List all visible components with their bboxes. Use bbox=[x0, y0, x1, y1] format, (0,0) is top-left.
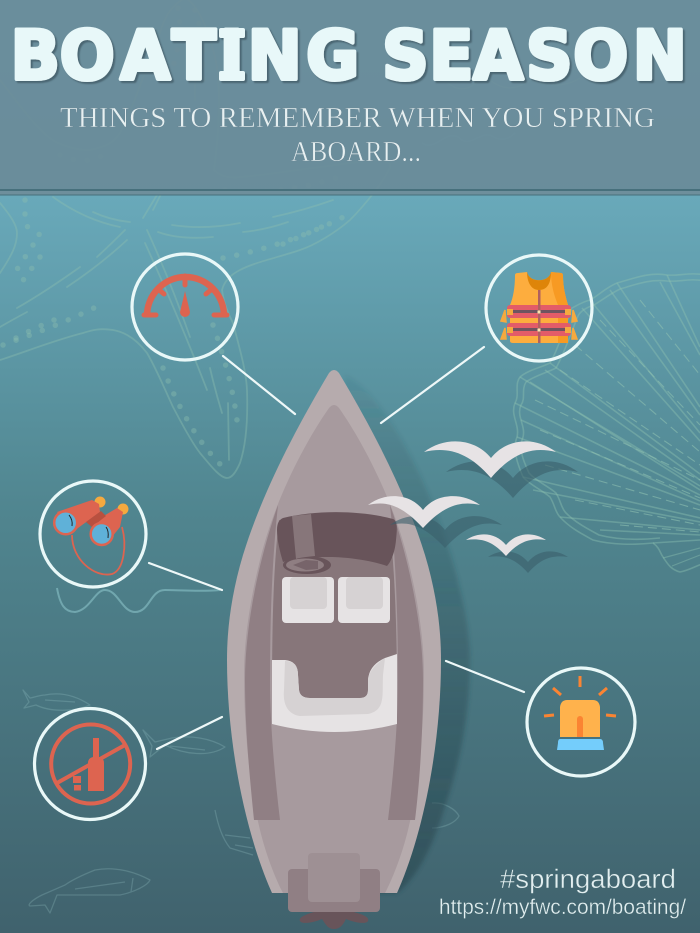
subtitle: THINGS TO REMEMBER WHEN YOU SPRING bbox=[60, 103, 655, 134]
front seats bbox=[282, 577, 390, 623]
motor bbox=[288, 853, 380, 929]
steering wheel bbox=[283, 556, 331, 574]
boat shadow bbox=[300, 375, 470, 893]
decoration: waves and fish bbox=[23, 76, 580, 913]
bird: small bbox=[466, 534, 546, 556]
bird shadows bbox=[390, 461, 578, 573]
rear bench seat bbox=[272, 654, 397, 732]
connector lines bbox=[149, 347, 524, 749]
website url: https://myfwc.com/boating/ bbox=[439, 896, 686, 919]
icon: speedometer bbox=[132, 254, 238, 360]
subtitle: ABOARD... bbox=[291, 137, 421, 168]
decoration: starfish outline bbox=[0, 0, 390, 478]
bird: medium bbox=[368, 496, 480, 528]
deck bbox=[244, 405, 424, 893]
icon: binoculars bbox=[40, 481, 146, 587]
boat bbox=[227, 370, 441, 929]
gunwale bands bbox=[245, 505, 280, 820]
windscreen bbox=[277, 512, 397, 566]
bird: large bbox=[424, 441, 556, 478]
birds bbox=[368, 441, 578, 573]
icon: life jacket bbox=[486, 255, 592, 361]
hashtag: #springaboard bbox=[500, 864, 676, 894]
decoration: scallop shell outline bbox=[514, 274, 700, 572]
title: BOATING SEASON bbox=[11, 15, 687, 95]
cockpit bbox=[272, 520, 397, 724]
hull bbox=[227, 370, 441, 893]
icon: no alcohol bbox=[34, 708, 146, 820]
subtitle bbox=[60, 103, 655, 168]
header band bbox=[0, 0, 700, 196]
icon: alarm beacon bbox=[527, 668, 635, 776]
